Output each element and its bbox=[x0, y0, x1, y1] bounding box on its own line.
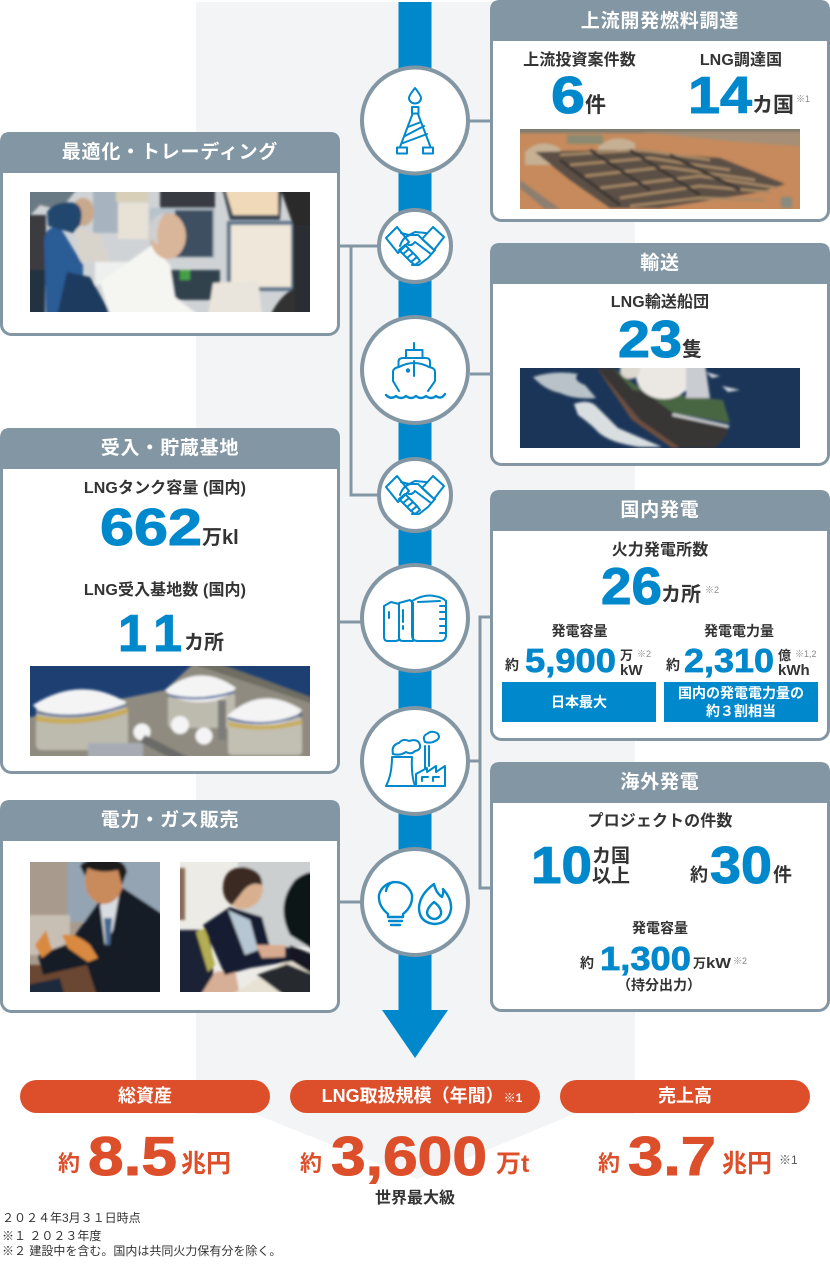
photo: salesman bbox=[30, 862, 160, 992]
stat: tank capacity: LNGタンク容量 (国内) bbox=[84, 478, 246, 497]
stat: power generated: ※1,2 bbox=[795, 649, 817, 659]
stat: thermal plants bbox=[601, 541, 719, 616]
stat: terminals count: 11 bbox=[118, 605, 182, 663]
stat: LNG procurement countries: 14 bbox=[688, 67, 752, 125]
stat: terminals count bbox=[84, 580, 246, 663]
icon: handshake circle lower bbox=[379, 459, 451, 531]
stat: overseas capacity bbox=[580, 920, 747, 993]
stat: LNG procurement countries: LNG調達国 bbox=[700, 51, 782, 69]
stat: LNG fleet: 23 bbox=[618, 311, 682, 369]
figure: LNG handling value bbox=[300, 1125, 530, 1187]
stat: LNG procurement countries bbox=[688, 51, 810, 125]
panel: receiving and storage terminals bbox=[0, 428, 340, 772]
stat: generation capacity: ※2 bbox=[637, 649, 651, 659]
stat: tank capacity: 662 bbox=[100, 499, 202, 557]
stat: overseas projects: 30 bbox=[710, 837, 772, 895]
photo: LNG tanks bbox=[30, 666, 310, 756]
stat: overseas projects: 件 bbox=[773, 864, 792, 886]
stat: overseas projects: プロジェクトの件数 bbox=[588, 812, 732, 830]
photo: LNG carrier bbox=[520, 368, 800, 448]
stat: power generated bbox=[666, 623, 817, 679]
footnotes bbox=[2, 1211, 281, 1258]
stat: generation capacity: 万 bbox=[620, 648, 633, 663]
stat: power generated: 2,310 bbox=[684, 642, 774, 679]
stat: overseas projects: カ国 bbox=[592, 845, 630, 867]
stat: power generated: kWh bbox=[778, 662, 810, 679]
figure: total assets value: 兆円 bbox=[181, 1150, 231, 1178]
stat: thermal plants: ※2 bbox=[705, 585, 719, 595]
figure: revenue value bbox=[598, 1125, 798, 1187]
stat: tank capacity bbox=[84, 478, 246, 557]
footnotes: ※２ 建設中を含む。国内は共同火力保有分を除く。 bbox=[2, 1243, 281, 1258]
stat: overseas capacity: 発電容量 bbox=[632, 920, 688, 936]
figure: LNG handling value: 3,600 bbox=[331, 1125, 487, 1187]
heading: terminals: 受入・貯蔵基地 bbox=[101, 436, 239, 459]
pill: LNG handling bbox=[290, 1080, 540, 1113]
icon: ship circle bbox=[362, 317, 468, 423]
stat: generation capacity: kW bbox=[620, 662, 643, 679]
icon: light bulb and flame circle bbox=[362, 849, 468, 955]
flow arrow bbox=[382, 2, 448, 1058]
figure: total assets value bbox=[58, 1125, 231, 1187]
stat: power generated: 約 bbox=[666, 657, 680, 673]
stat: upstream projects: 上流投資案件数 bbox=[523, 50, 636, 69]
stat: overseas capacity: ※2 bbox=[733, 956, 747, 966]
icon: handshake circle upper bbox=[379, 210, 451, 282]
callout: about 30 percent of domestic power: 約３割相当 bbox=[706, 703, 776, 719]
stat: generation capacity: 発電容量 bbox=[552, 623, 608, 639]
icon: storage tanks circle bbox=[362, 565, 468, 671]
figure: total assets value: 約 bbox=[58, 1151, 80, 1176]
stat: power generated: 発電電力量 bbox=[704, 623, 774, 639]
figure: revenue value: 兆円 bbox=[722, 1150, 772, 1178]
stat: thermal plants: カ所 bbox=[661, 583, 701, 606]
stat: overseas capacity: 万 bbox=[693, 956, 706, 971]
pill: revenue bbox=[560, 1080, 810, 1113]
footnotes: ※１ ２０２３年度 bbox=[2, 1229, 101, 1243]
heading: trading: 最適化・トレーディング bbox=[62, 140, 278, 163]
photo: LNG plant bbox=[515, 124, 805, 209]
stat: thermal plants: 26 bbox=[601, 558, 662, 616]
panel: optimization and trading bbox=[0, 132, 340, 334]
photo: trading floor bbox=[26, 188, 314, 316]
pill: total assets: 総資産 bbox=[118, 1086, 172, 1106]
icon: power plant circle bbox=[362, 708, 468, 814]
stat: LNG procurement countries: カ国 bbox=[752, 94, 794, 117]
connector lines bbox=[340, 121, 490, 902]
callout: about 30 percent of domestic power bbox=[664, 682, 818, 722]
stat: generation capacity: 5,900 bbox=[525, 642, 616, 679]
background band bbox=[196, 2, 635, 1179]
figure: revenue value: 約 bbox=[598, 1151, 620, 1176]
stat: overseas projects: 約 bbox=[690, 865, 708, 885]
footnotes: ２０２４年3月３１日時点 bbox=[2, 1211, 141, 1225]
pill: revenue: 売上高 bbox=[658, 1086, 712, 1106]
stat: overseas projects bbox=[531, 812, 792, 895]
stat: LNG procurement countries: ※1 bbox=[796, 94, 810, 104]
stat: terminals count: LNG受入基地数 (国内) bbox=[84, 580, 246, 599]
panel: domestic power generation bbox=[490, 490, 830, 740]
callout: largest in Japan: 日本最大 bbox=[551, 694, 607, 710]
stat: tank capacity: 万kl bbox=[202, 527, 239, 549]
stat: overseas capacity: （持分出力） bbox=[617, 977, 701, 993]
stat: thermal plants: 火力発電所数 bbox=[612, 541, 708, 559]
stat: power generated: 億 bbox=[778, 648, 791, 663]
figure: total assets value: 8.5 bbox=[88, 1125, 177, 1187]
heading: overseas generation: 海外発電 bbox=[620, 771, 700, 793]
stat: generation capacity bbox=[505, 623, 651, 679]
figure: revenue value: 3.7 bbox=[628, 1125, 716, 1187]
heading: transport: 輸送 bbox=[640, 252, 680, 274]
panel: upstream development and fuel procurement bbox=[490, 0, 830, 220]
stat: terminals count: カ所 bbox=[184, 631, 224, 654]
pill: LNG handling: LNG取扱規模（年間）※1 bbox=[322, 1085, 523, 1106]
stat: LNG fleet bbox=[611, 293, 709, 369]
stat: upstream projects: 6 bbox=[551, 67, 585, 125]
photo: saleswoman meeting bbox=[180, 862, 310, 992]
callout: largest in Japan bbox=[502, 682, 656, 722]
figure: LNG handling value: 万t bbox=[496, 1150, 530, 1178]
stat: upstream projects: 件 bbox=[585, 94, 606, 117]
icon: gas tower circle bbox=[362, 68, 468, 174]
heading: sales: 電力・ガス販売 bbox=[101, 809, 239, 831]
panel: overseas power generation bbox=[490, 762, 830, 1010]
stat: overseas capacity: 1,300 bbox=[600, 940, 691, 977]
stat: generation capacity: 約 bbox=[505, 657, 519, 673]
stat: LNG fleet: 隻 bbox=[682, 338, 702, 361]
figure: LNG handling value: 約 bbox=[300, 1151, 322, 1176]
heading: upstream: 上流開発燃料調達 bbox=[581, 10, 739, 32]
figure: revenue value: ※1 bbox=[779, 1153, 798, 1167]
stat: overseas projects: 以上 bbox=[592, 865, 630, 887]
pill: total assets bbox=[20, 1080, 270, 1113]
note: world's largest class: 世界最大級 bbox=[375, 1189, 455, 1207]
stat: overseas capacity: kW bbox=[706, 955, 732, 972]
stat: overseas projects: 10 bbox=[531, 837, 592, 895]
stat: upstream projects bbox=[523, 50, 636, 125]
stat: LNG fleet: LNG輸送船団 bbox=[611, 293, 709, 311]
heading: domestic generation: 国内発電 bbox=[620, 499, 700, 521]
panel: power and gas sales bbox=[0, 800, 340, 1012]
callout: about 30 percent of domestic power: 国内の発電電力量の bbox=[678, 685, 804, 701]
panel: transport bbox=[490, 243, 830, 464]
stat: overseas capacity: 約 bbox=[580, 955, 594, 971]
